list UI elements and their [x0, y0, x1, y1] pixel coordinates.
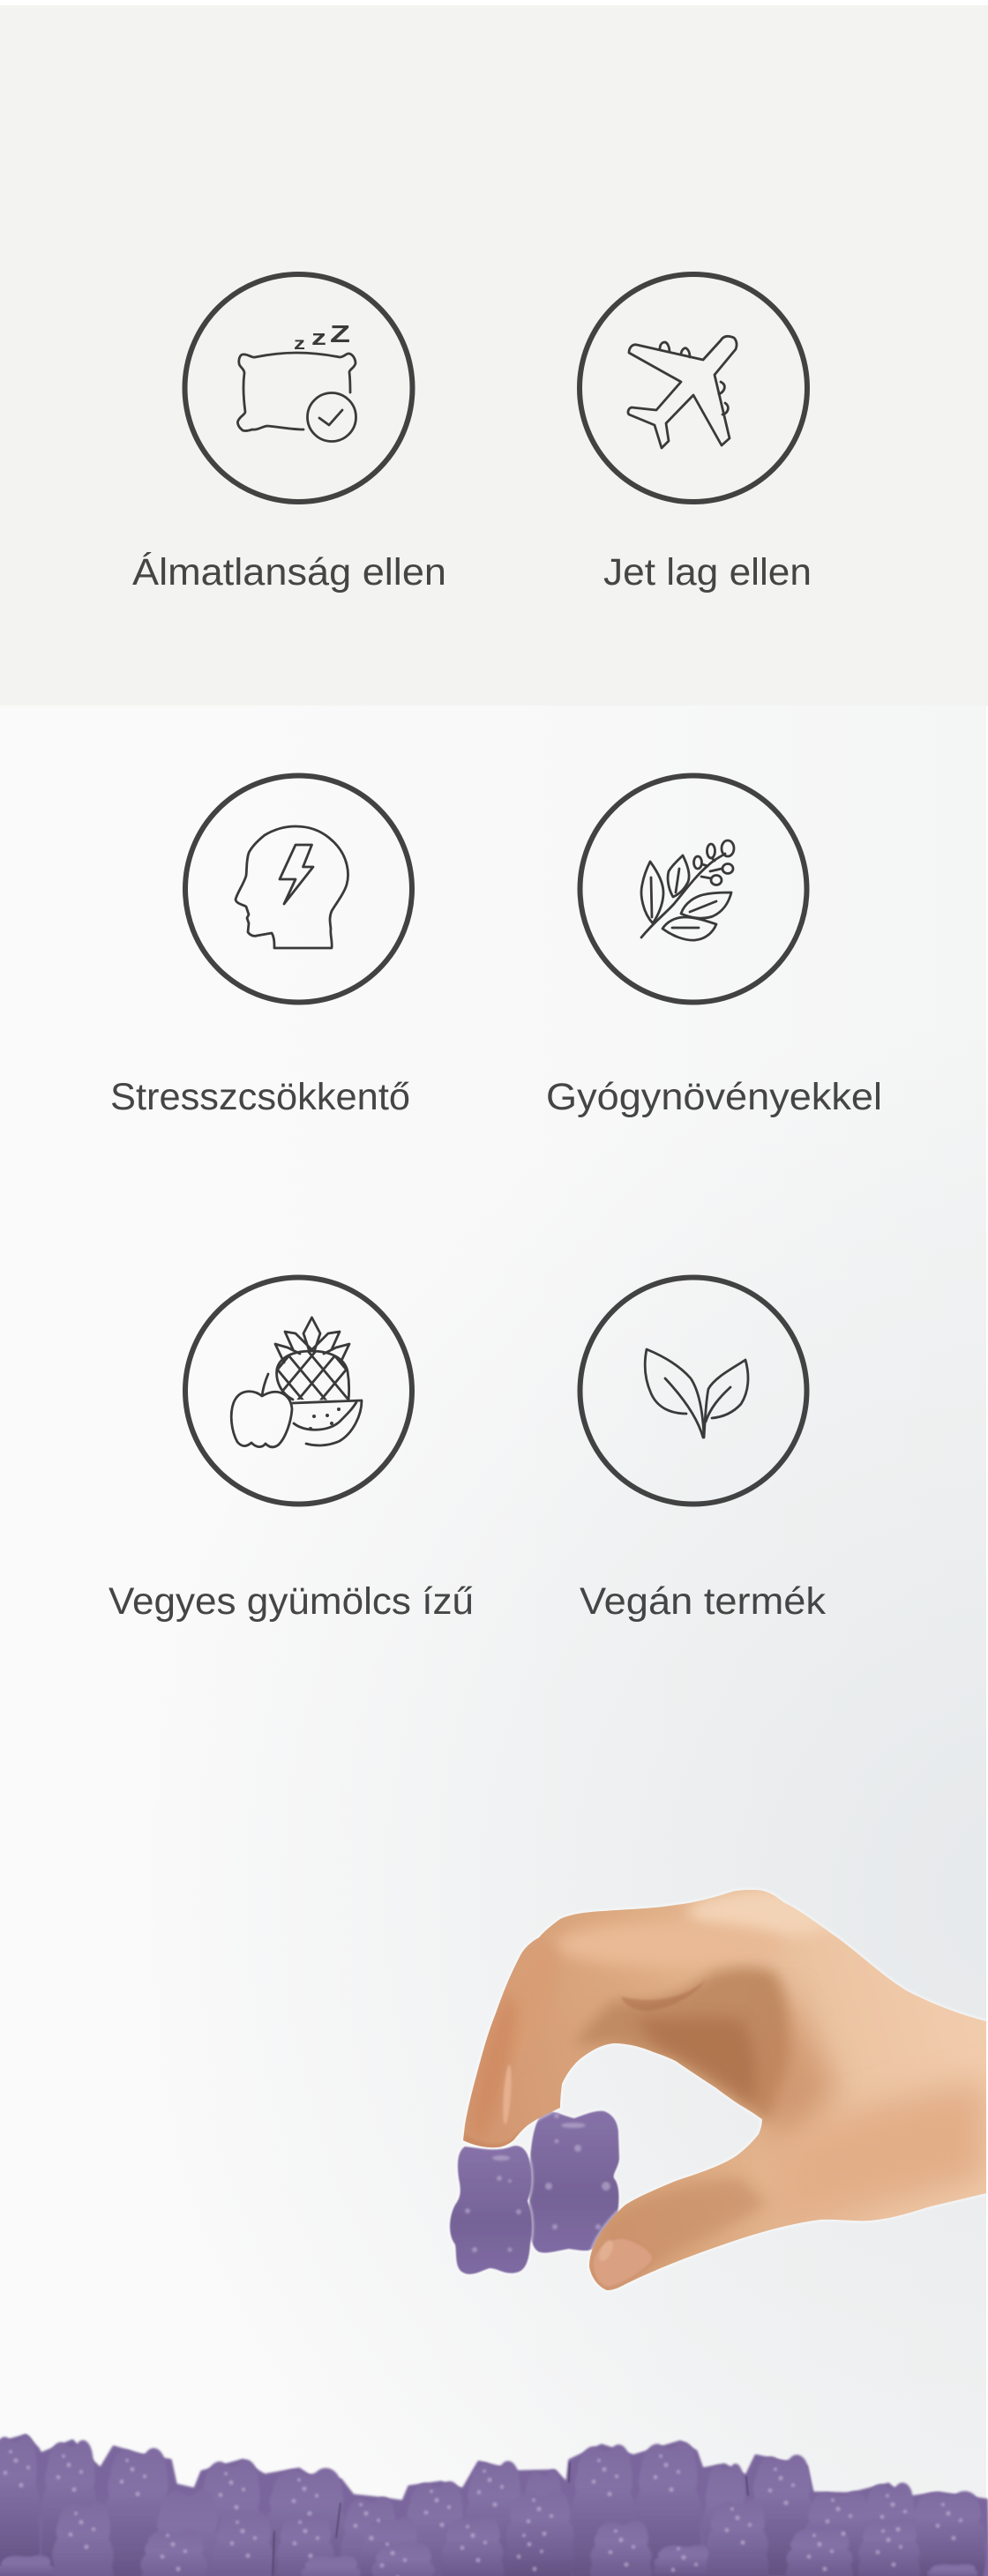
hand — [463, 1890, 986, 2290]
feature: sleep — [132, 274, 446, 594]
thumb nail — [593, 2238, 653, 2288]
feature: vegan — [580, 1277, 827, 1623]
label: sleep: Álmatlanság ellen — [132, 551, 446, 594]
icon: two leaves — [580, 1277, 806, 1505]
label: stress: Stresszcsökkentő — [110, 1076, 410, 1118]
front row of bears — [0, 2489, 978, 2576]
label: herbs: Gyógynövényekkel — [546, 1076, 882, 1118]
gummy bear pile — [0, 2435, 988, 2576]
panel: top section — [0, 5, 988, 706]
icon: pillow with check and zzz — [185, 274, 413, 502]
dark gaps between bears — [273, 2462, 748, 2576]
feature: jet lag — [580, 274, 812, 594]
label: vegan: Vegán termék — [580, 1580, 827, 1623]
icon: airplane — [580, 274, 807, 502]
icon: pineapple apple and watermelon — [185, 1277, 412, 1505]
icon: herb branch — [580, 776, 806, 1002]
feature: herbs — [546, 776, 882, 1118]
icon: head with lightning bolt — [185, 776, 412, 1002]
icon: pillow with check and zzz: z — [311, 326, 326, 350]
back row of bears — [0, 2435, 985, 2576]
icon: pillow with check and zzz: Z — [330, 320, 350, 347]
icon: pillow with check and zzz: z — [294, 335, 305, 354]
gummy bear: right — [529, 2110, 619, 2253]
bear highlights — [4, 2450, 962, 2576]
label: jet lag: Jet lag ellen — [603, 551, 812, 594]
feature: stress — [110, 776, 412, 1118]
feature: fruit flavour — [109, 1277, 474, 1623]
illustration: hand holding two gummy bears — [449, 1890, 986, 2290]
label: fruit flavour: Vegyes gyümölcs ízű — [109, 1580, 474, 1623]
gummy bear: left — [450, 2146, 532, 2274]
